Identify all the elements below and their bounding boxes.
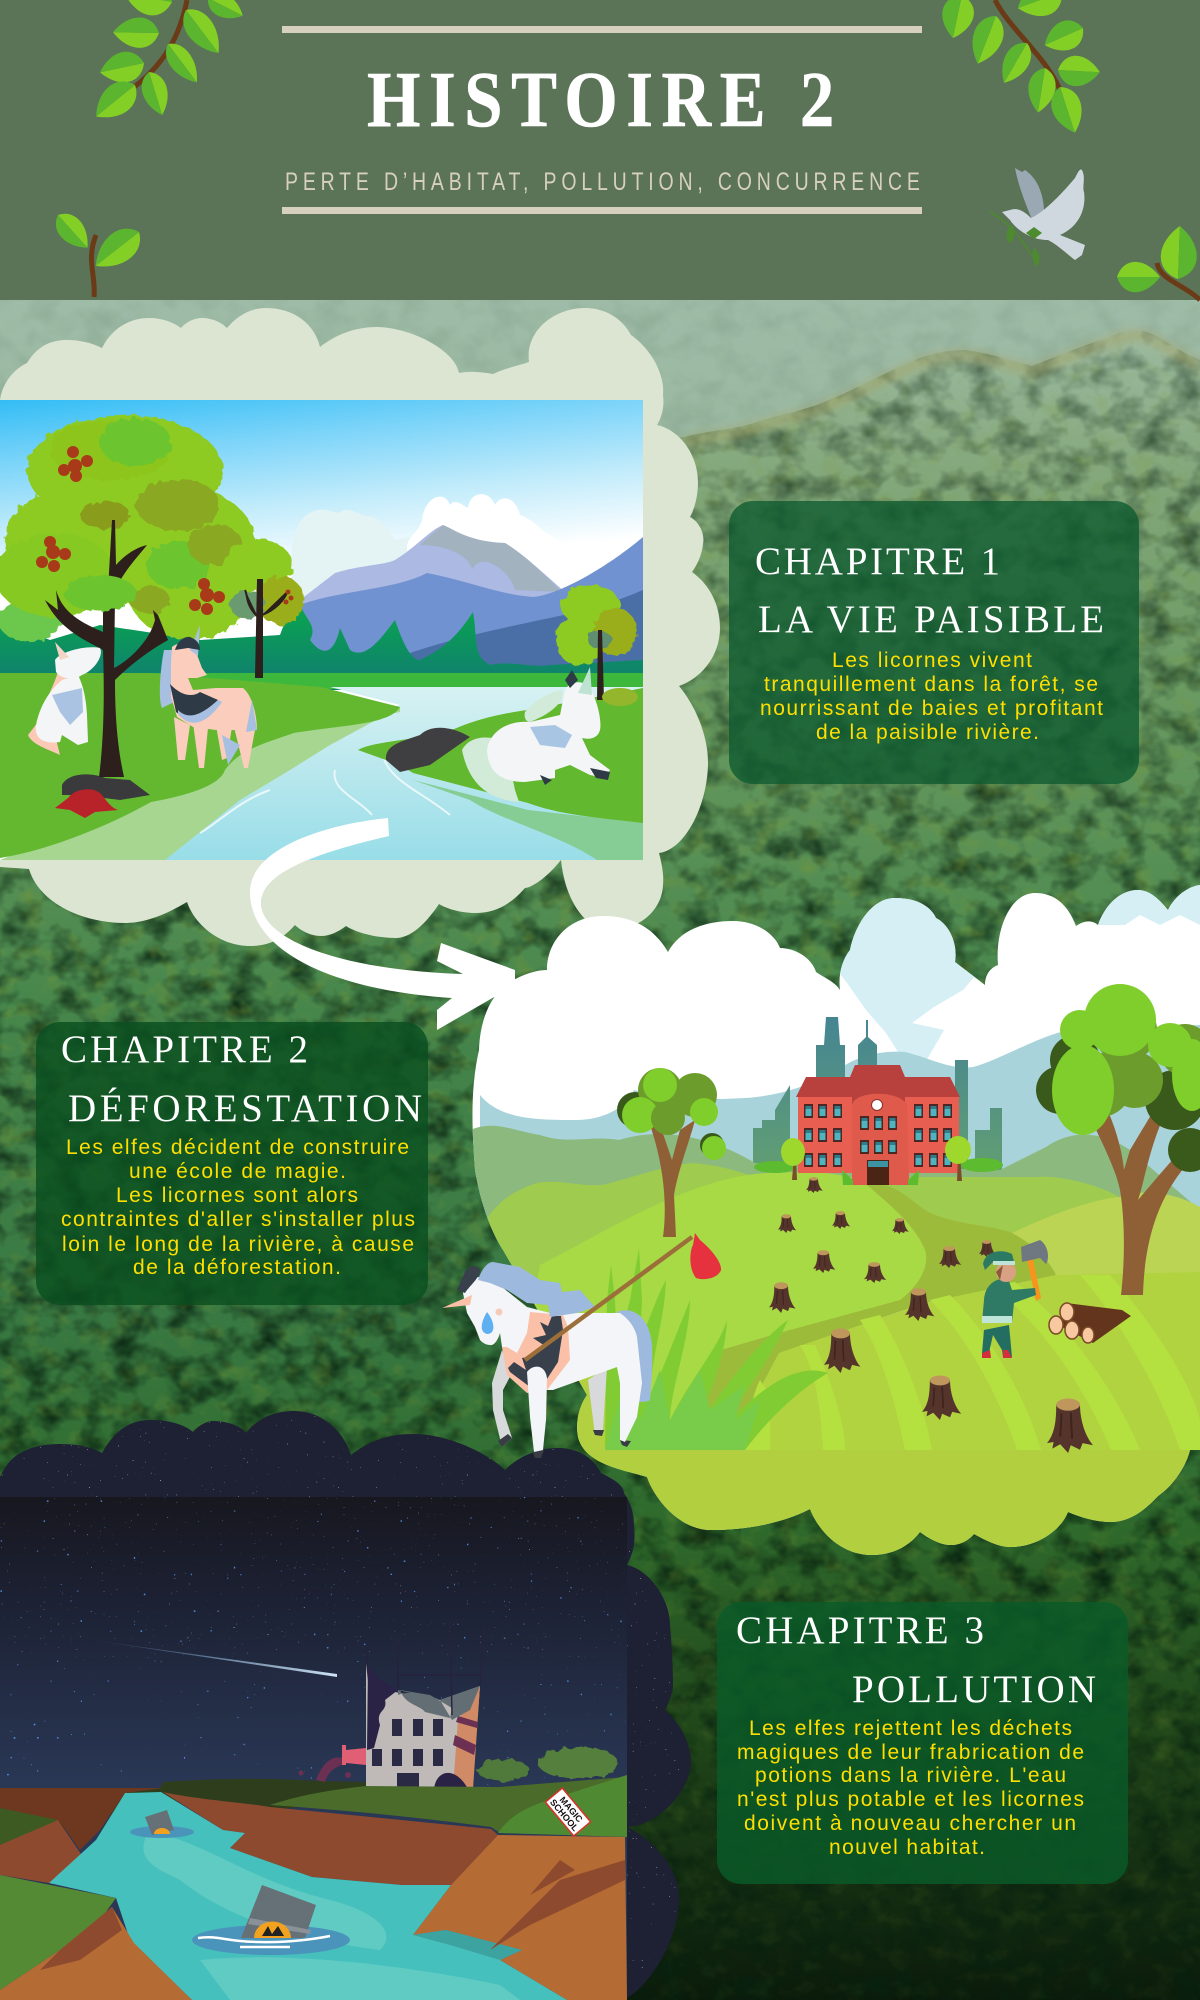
panel: chapter 3 [717,1602,1128,1884]
tree right [1036,984,1200,1295]
title: HISTOIRE 2 [367,57,834,144]
chapter 2 body: Les licornes sont alors [116,1184,358,1207]
chapter 1 body: de la paisible rivière. [816,721,1039,744]
river highlights [200,750,450,833]
skyline bushes [754,1158,1003,1173]
polluted river [49,1792,567,2000]
icon: bottom left sprout [49,207,148,297]
mane [478,1262,595,1317]
back hills [488,1163,1119,1300]
curved arrow to scene 2 [250,818,515,1030]
scene 1: peaceful river valley [0,400,650,860]
tear [482,1312,493,1334]
left cliffs [0,1788,163,1883]
peach collar [502,1312,570,1393]
icon: top right leafy branch [937,0,1101,137]
chapter 2 body: loin le long de la rivière, à cause [62,1233,414,1256]
right island [358,688,643,860]
chapter 2 body: une école de magie. [129,1160,346,1183]
hooves [498,1430,631,1458]
lime foreground edge [470,1290,620,1465]
chapter 3 heading: CHAPITRE 3 [736,1609,984,1652]
tail [617,1310,652,1402]
ruined school [366,1620,484,1789]
scene 3: polluted river at night [0,1497,627,2000]
sage hills [470,1126,1200,1300]
lower left bank [0,1875,192,2000]
chapter 1 body: Les licornes vivent [832,649,1032,672]
speech cloud behind first scene [0,308,720,946]
chapter 1 subheading: LA VIE PAISIBLE [758,598,1104,641]
scene 2: deforestation and magic school [470,880,1200,1560]
river [160,687,643,860]
sign: magic school: MAGIC [558,1795,585,1825]
right cliff shadows [490,1860,625,1950]
subtitle: PERTE D’HABITAT, POLLUTION, CONCURRENCE [285,168,920,196]
chapter 3 subheading: POLLUTION [852,1668,1096,1711]
red bag [690,1233,721,1279]
chapter 2 body [61,1136,415,1279]
chapter 3 body [737,1717,1084,1859]
chapter 3 body: potions dans la rivière. L'eau [755,1764,1066,1787]
back ground [0,1779,366,1830]
leaking pipe [298,1745,366,1782]
grass bank [270,1775,627,1837]
front leg [527,1367,547,1452]
right hill [1012,1193,1200,1300]
red berries pile [55,789,118,818]
pale sky [837,880,1200,1063]
school building [796,1065,960,1185]
striped field [470,1272,1200,1560]
dark zigzag collar [503,1316,563,1387]
header band [0,0,1200,300]
chapter 3 body: Les elfes rejettent les déchets [749,1717,1072,1740]
bushes [477,1747,618,1781]
bottom rule [282,207,922,214]
unicorn: pink standing [160,625,257,768]
far legs [492,1350,607,1447]
forest strip [0,609,643,690]
icon: top left leafy branch [87,0,248,128]
grass tuft [605,1248,828,1450]
skyscrapers [753,1017,1002,1180]
small tree behind [224,539,304,677]
central cliff [163,1792,498,1885]
shooting star [91,1640,337,1677]
rocks [62,728,470,800]
chapter 1 body: nourrissant de baies et profitant [760,697,1103,720]
barrel small [130,1810,194,1838]
right cliff [413,1835,627,2000]
chapter 2 body: de la déforestation. [133,1256,341,1279]
left meadow [0,673,400,860]
icon: dove with olive branch [990,168,1085,267]
berries [36,446,225,615]
chapter 3 body: nouvel habitat. [829,1836,985,1859]
sign: magic school [545,1788,591,1836]
panel: chapter 2 [36,1022,428,1305]
chapter 1 body: tranquillement dans la forêt, se [764,673,1098,696]
horn [442,1295,472,1308]
chapter 2 body: contraintes d'aller s'installer plus [61,1208,415,1231]
panel: chapter 1 [729,501,1139,784]
chapter 3 body: doivent à nouveau chercher un [744,1812,1076,1835]
sign: magic school: SCHOOL [548,1797,581,1834]
dirt path [690,1184,1056,1430]
log pile [1049,1303,1131,1343]
stick [525,1237,692,1360]
mountains [302,525,643,666]
big tree [0,415,255,777]
tree stumps [769,1177,1093,1453]
speech cloud behind third scene [0,1410,700,2000]
distant clouds [291,494,554,597]
chapter 1 heading: CHAPITRE 1 [755,540,1000,583]
unicorn: white lying [462,667,610,802]
chapter 3 body: magiques de leur frabrication de [737,1741,1084,1764]
body and neck [463,1277,642,1442]
chapter 2 heading: CHAPITRE 2 [61,1028,308,1071]
unicorn: white sitting [28,642,101,755]
sad unicorn with bindle [442,1233,721,1458]
chapter 3 body: n'est plus potable et les licornes [737,1788,1084,1811]
far right tree [556,585,638,706]
chapter 2 subheading: DÉFORESTATION [68,1086,422,1130]
black forelock [457,1266,480,1293]
barrel large [192,1885,350,1955]
blue hills [480,1025,1200,1250]
tree left [617,1068,726,1237]
chapter 2 body: Les elfes décident de construire [66,1136,409,1159]
top rule [282,26,922,33]
chapter 1 body [760,649,1103,744]
small trees at school [781,1136,971,1181]
cheek [496,1308,502,1316]
icon: bottom right sprout [1117,225,1200,300]
main hill [530,1172,946,1455]
elf with axe [982,1240,1048,1358]
